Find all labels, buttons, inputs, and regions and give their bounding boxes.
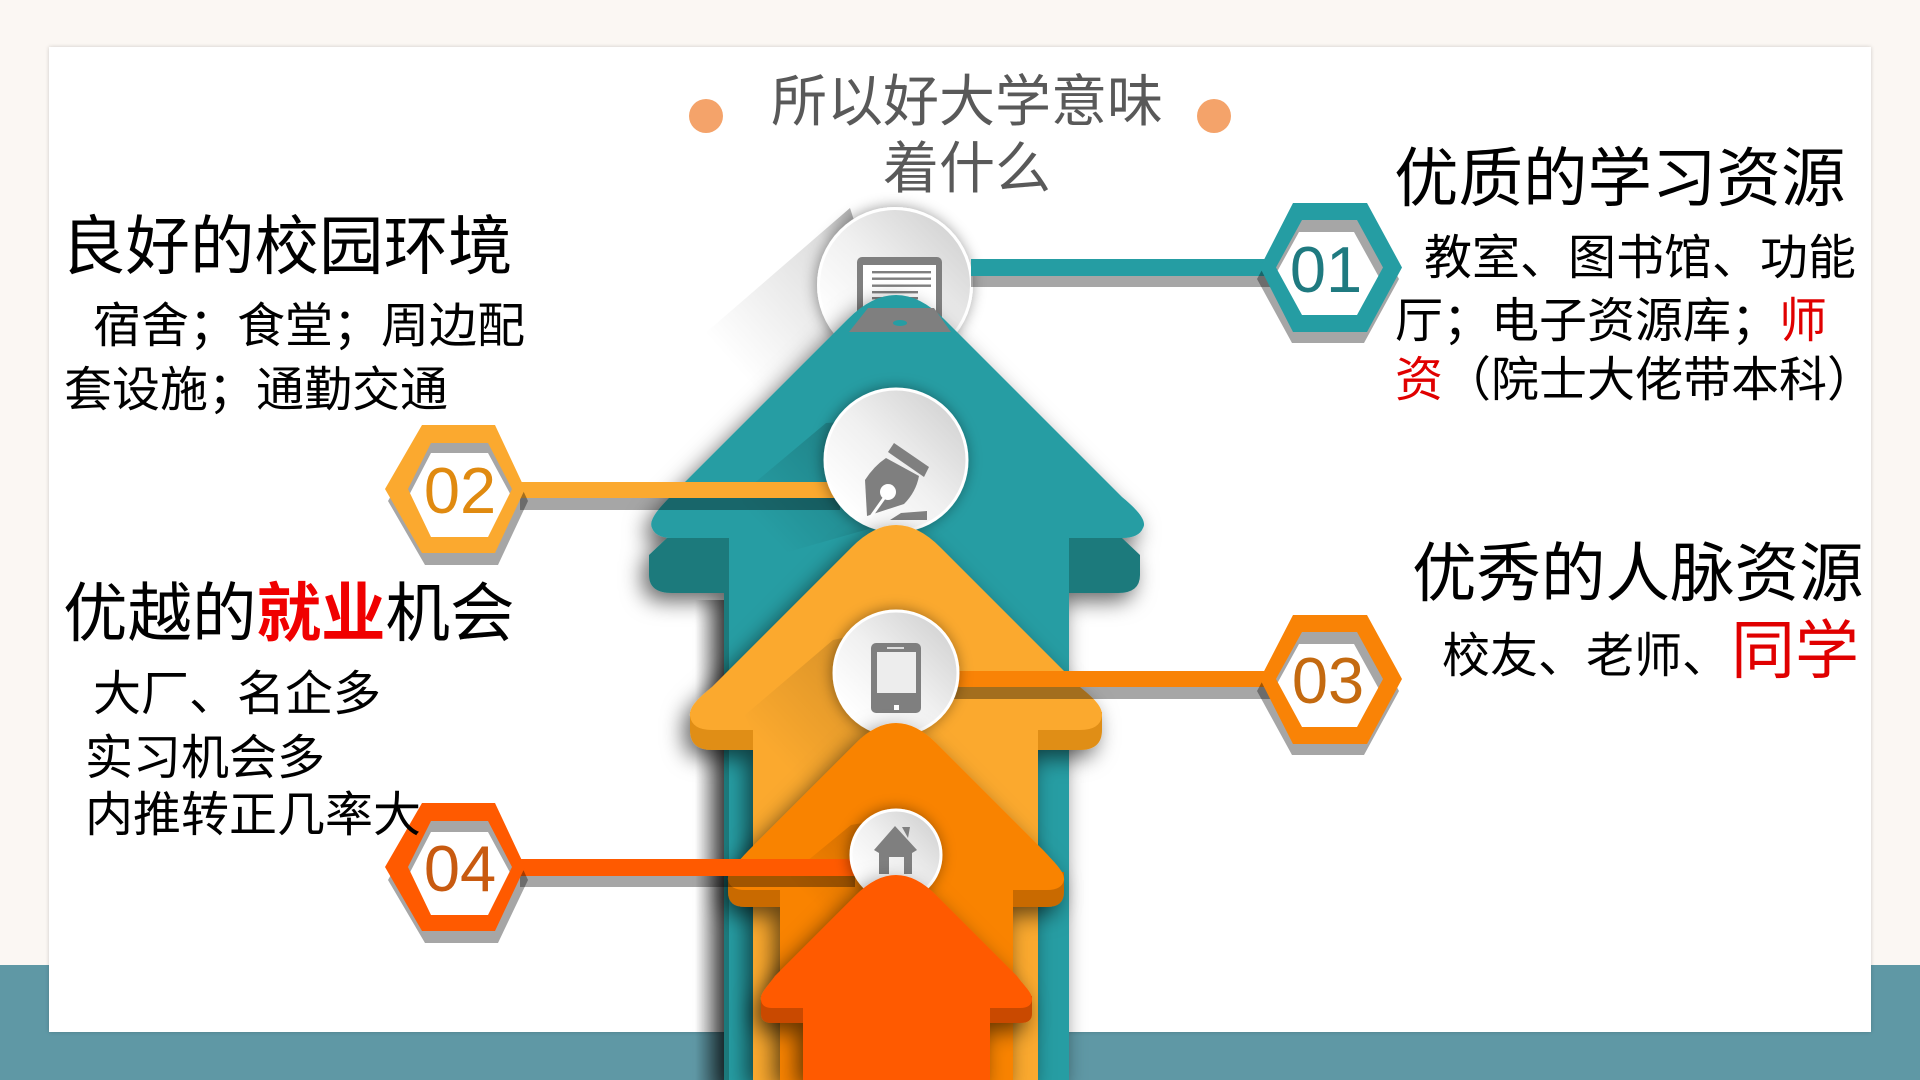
text: network detail: 校友、老师、 bbox=[1442, 630, 1730, 683]
icon circle 3 with phone bbox=[834, 611, 958, 735]
text: 实习机会多 bbox=[85, 732, 325, 785]
hexagon badge 03: 03 bbox=[1292, 644, 1364, 717]
title: 着什么 bbox=[883, 137, 1051, 200]
long shadow of circle 2 bbox=[740, 420, 900, 560]
hexagon badge 04: 04 bbox=[424, 832, 496, 905]
text: 资（院士大佬带本科） bbox=[1395, 354, 1875, 407]
hexagon badge 03 bbox=[1257, 615, 1402, 755]
text: 教室、图书馆、功能 bbox=[1424, 232, 1856, 285]
connector line 03 bbox=[950, 671, 1275, 699]
shaft side shadow bbox=[695, 600, 724, 1080]
connector line 02 bbox=[520, 482, 840, 510]
heading: campus environment: 良好的校园环境 bbox=[61, 211, 513, 283]
text: 内推转正几率大 bbox=[85, 789, 421, 842]
connector line 01 bbox=[971, 259, 1275, 287]
hexagon badge 01 bbox=[1257, 203, 1402, 343]
long shadow of circle 3 bbox=[745, 630, 900, 800]
orange arrow bbox=[728, 723, 1064, 1080]
page background band bbox=[0, 965, 1920, 1080]
title: 所以好大学意味 bbox=[771, 70, 1163, 133]
long shadow of circle 4 bbox=[790, 820, 900, 930]
laptop base bbox=[849, 308, 951, 332]
hexagon badge 02 bbox=[385, 425, 528, 565]
teal arrow bbox=[649, 295, 1144, 1080]
icon circle 1 with laptop screen bbox=[818, 208, 972, 362]
title dots bbox=[689, 99, 1231, 133]
icon circle 2 with fountain pen bbox=[825, 389, 967, 531]
hexagon badge 01: 01 bbox=[1290, 233, 1362, 306]
text: classmates highlight: 同学 bbox=[1731, 615, 1859, 687]
yellow arrow bbox=[690, 525, 1102, 1080]
text: employment detail bbox=[85, 668, 421, 842]
text: study resources detail bbox=[1395, 232, 1875, 407]
long shadow of circle 1 bbox=[680, 208, 880, 430]
red-orange arrow bbox=[761, 875, 1032, 1080]
text: 套设施；通勤交通 bbox=[64, 364, 448, 417]
connector line 04 bbox=[520, 859, 855, 887]
hexagon badge 02: 02 bbox=[424, 454, 496, 527]
text: 厅；电子资源库；师 bbox=[1395, 295, 1827, 348]
text: 宿舍；食堂；周边配 bbox=[93, 300, 525, 353]
title bbox=[771, 70, 1163, 200]
text: 大厂、名企多 bbox=[93, 668, 381, 721]
heading: employment: 优越的就业机会 bbox=[63, 578, 515, 650]
hexagon badge 04 bbox=[385, 803, 528, 943]
heading: network: 优秀的人脉资源 bbox=[1412, 538, 1864, 610]
icon circle 4 with house bbox=[851, 810, 941, 900]
heading: study resources: 优质的学习资源 bbox=[1394, 143, 1846, 215]
text: campus environment detail bbox=[64, 300, 525, 417]
